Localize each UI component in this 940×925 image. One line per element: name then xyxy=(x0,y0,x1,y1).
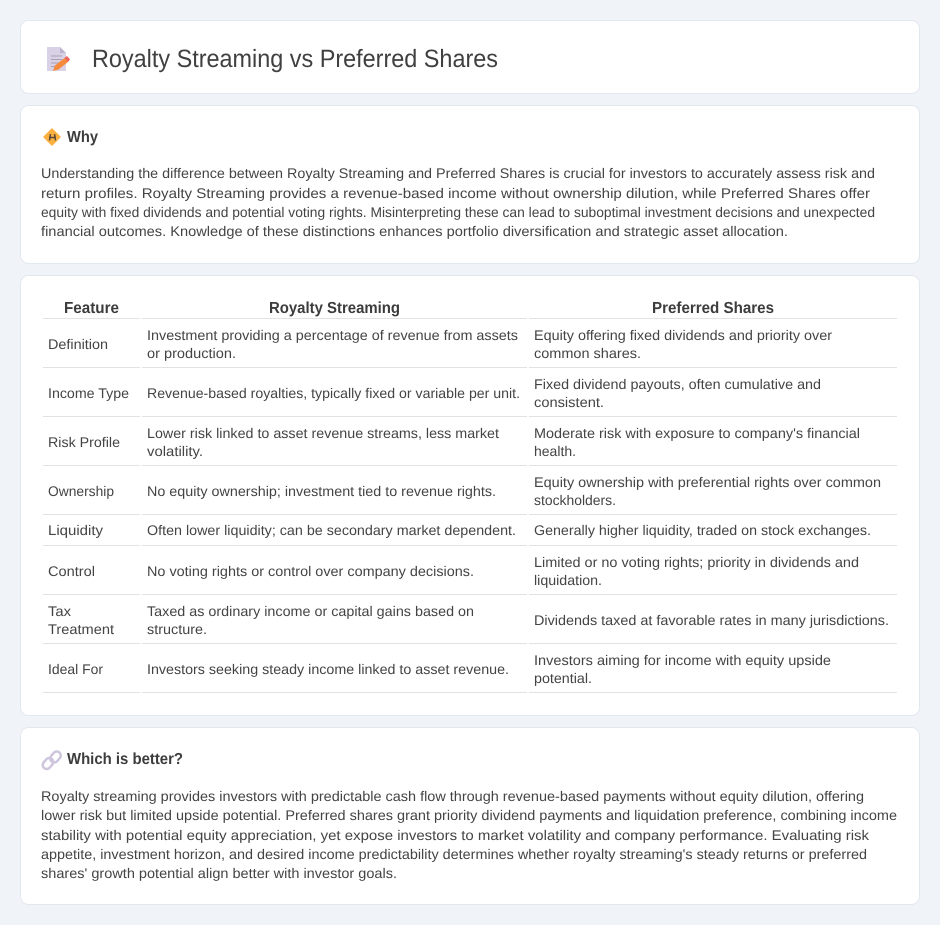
row: control: No voting rights or control over company decisions. xyxy=(147,563,474,579)
table header row: Preferred Shares xyxy=(652,300,774,317)
row: control xyxy=(43,554,897,595)
row: risk profile: Moderate risk with exposure to company's financial xyxy=(534,425,860,441)
row: definition: common shares. xyxy=(534,345,641,361)
text block: verdict xyxy=(41,788,897,881)
icon: warning diamond xyxy=(44,129,60,145)
panel: comparison table xyxy=(20,276,920,716)
row: ideal for: Investors seeking steady income linked to asset revenue. xyxy=(147,661,509,677)
row: risk profile: Risk Profile xyxy=(48,434,120,450)
row: definition: or production. xyxy=(147,345,236,361)
row: liquidity xyxy=(43,522,897,546)
text block: verdict: stability with potential equity appreciation, yet expose investors to market volatility and company performance. Evaluating risk xyxy=(41,827,870,843)
row: ideal for: potential. xyxy=(534,670,592,686)
row: ideal for: Investors aiming for income with equity upside xyxy=(534,652,831,668)
row: ideal for: Ideal For xyxy=(48,661,103,677)
text block: verdict: shares' growth potential align better with investor goals. xyxy=(41,865,397,881)
row: ownership: stockholders. xyxy=(534,492,616,508)
panel: header xyxy=(20,20,920,94)
table header row: Royalty Streaming xyxy=(269,300,400,317)
panel: why xyxy=(20,106,920,264)
text block: why explanation xyxy=(41,165,875,239)
row: definition: Definition xyxy=(48,336,108,352)
text block: why explanation: equity with fixed dividends and potential voting rights. Misinterpreting these can lead to suboptimal investment decisions and unexpected xyxy=(41,204,875,220)
row: risk profile xyxy=(43,425,897,466)
row: ownership: Equity ownership with preferential rights over common xyxy=(534,474,881,490)
row: control: Control xyxy=(48,563,95,579)
row: liquidity: Liquidity xyxy=(48,522,103,538)
text block: why explanation: Understanding the difference between Royalty Streaming and Preferred Shares is crucial for investors to accurately assess risk and xyxy=(41,165,875,181)
heading: which is better: Which is better? xyxy=(67,751,183,768)
row: definition: Investment providing a percentage of revenue from assets xyxy=(147,327,518,343)
row: liquidity: Generally higher liquidity, traded on stock exchanges. xyxy=(534,522,871,538)
row: risk profile: health. xyxy=(534,443,576,459)
row: definition xyxy=(43,327,897,368)
row: ideal for xyxy=(43,652,897,693)
row: ownership: Ownership xyxy=(48,483,114,499)
row: control: liquidation. xyxy=(534,572,602,588)
row: tax treatment: Treatment xyxy=(48,621,114,637)
row: risk profile: volatility. xyxy=(147,443,203,459)
icon: document with pencil xyxy=(47,47,70,71)
row: tax treatment: Tax xyxy=(48,603,71,619)
text block: why explanation: return profiles. Royalty Streaming provides a revenue-based income without ownership dilution, while Preferred Shares offer xyxy=(41,185,870,201)
row: income type: consistent. xyxy=(534,394,604,410)
row: tax treatment: structure. xyxy=(147,621,207,637)
row: liquidity: Often lower liquidity; can be secondary market dependent. xyxy=(147,522,516,538)
text block: verdict: appetite, investment horizon, and desired income predictability determines whether royalty streaming's steady returns or preferred xyxy=(41,846,867,862)
row: tax treatment xyxy=(43,603,897,644)
text block: verdict: Royalty streaming provides investors with predictable cash flow through revenue-based payments without equity dilution, offering xyxy=(41,788,864,804)
icon: chain link xyxy=(41,750,62,771)
row: tax treatment: Dividends taxed at favorable rates in many jurisdictions. xyxy=(534,612,889,628)
row: ownership: No equity ownership; investment tied to revenue rights. xyxy=(147,483,496,499)
row: ownership xyxy=(43,474,897,515)
text block: why explanation: financial outcomes. Knowledge of these distinctions enhances portfolio diversification and strategic asset allocation. xyxy=(41,223,788,239)
text block: verdict: lower risk but limited upside potential. Preferred shares grant priority dividend payments and liquidation preference, combining income xyxy=(41,807,897,823)
row: income type: Income Type xyxy=(48,385,129,401)
row: tax treatment: Taxed as ordinary income or capital gains based on xyxy=(147,603,474,619)
row: income type xyxy=(43,376,897,417)
row: income type: Revenue-based royalties, typically fixed or variable per unit. xyxy=(147,385,520,401)
row: risk profile: Lower risk linked to asset revenue streams, less market xyxy=(147,425,499,441)
row: control: Limited or no voting rights; priority in dividends and xyxy=(534,554,859,570)
table header row xyxy=(43,300,897,319)
heading: why: Why xyxy=(67,129,98,146)
row: definition: Equity offering fixed dividends and priority over xyxy=(534,327,832,343)
table header row: Feature xyxy=(64,300,119,317)
title: Royalty Streaming vs Preferred Shares xyxy=(92,45,498,73)
panel: which is better xyxy=(20,728,920,904)
row: income type: Fixed dividend payouts, often cumulative and xyxy=(534,376,821,392)
